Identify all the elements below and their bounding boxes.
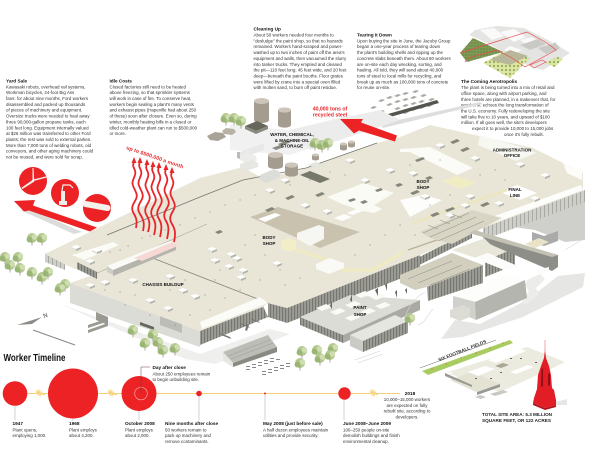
heading: Worker Timeline: Worker Timeline <box>4 352 66 364</box>
cylinders <box>254 98 355 177</box>
label: body shop east <box>416 179 430 190</box>
label: paint shop: PAINT <box>353 305 367 310</box>
label: paint shop: SHOP <box>354 312 366 317</box>
arrow: equipment leaving site <box>14 200 97 234</box>
text: Idle Costs: idled cold-weather plant can run to $500,000 <box>110 125 198 130</box>
text: Cleaning Up: with molten sand, to burn off paint residue. <box>254 85 337 90</box>
circles <box>3 381 27 406</box>
timeline label: Nine months after close: remove contaminants. <box>165 439 209 444</box>
text: Yard Sale: at $26 million was transferred to other Ford <box>6 131 91 136</box>
text: Cleaning Up: remained. Workers hand-scraped and power- <box>254 44 343 49</box>
text: Cleaning Up: About 50 workers needed four months to <box>254 32 334 38</box>
text: Idle Costs: will work in case of fire. To conserve heat, <box>110 96 191 101</box>
timeline label: May 2008: May 2008 (just before sale) <box>263 421 323 426</box>
text: Cleaning Up <box>254 27 347 90</box>
label: administration office: OFFICE <box>504 153 520 158</box>
leader lines <box>15 395 344 421</box>
text: Yard Sale: plants; the rest was sold to external parties. <box>6 137 91 142</box>
label: final line: LINE <box>510 193 520 198</box>
text: Idle Costs: or more. <box>110 131 126 136</box>
west block wall <box>45 253 65 270</box>
storage tanks and utility buildings <box>207 98 355 183</box>
paint shop <box>300 283 420 352</box>
central wall <box>400 230 472 275</box>
label: body shop west <box>262 235 276 246</box>
seam between chassis and body shop <box>93 224 207 275</box>
label: body shop east: SHOP <box>417 185 429 190</box>
yellow transfer tubes <box>284 243 403 270</box>
rooftop gear <box>215 139 490 234</box>
text: Tearing It Down: began a one-year process of tearing down <box>357 44 441 49</box>
text: Idle Costs: above freezing, so that sprinkler systems <box>110 90 191 95</box>
compass north arrow: N <box>43 313 49 320</box>
west-side loading docks <box>88 312 260 339</box>
parking lot: demolished rows <box>367 90 483 128</box>
timeline label: June 2008–June 2009: demolish buildings and finish <box>343 433 400 438</box>
text: Cleaning Up: "desludge" the paint shop, so that no hazards <box>254 38 344 43</box>
label: final line: FINAL <box>508 187 522 192</box>
text: Idle Costs <box>110 78 198 136</box>
open bay in final line <box>420 210 502 244</box>
timeline label: October 2008: about 2,000. <box>125 433 150 438</box>
text: Cleaning Up: the pit—110 feet long, 45 feet wide, and 20 feet <box>254 68 347 73</box>
icon: Empire State Building <box>533 340 567 410</box>
south-east block <box>400 230 585 325</box>
text: Cleaning Up: equipment and walls, then vacuumed the slurry <box>254 56 347 61</box>
ground shadows <box>60 110 585 364</box>
text: Yard Sale: three 90,000-gallon propane tanks, each <box>6 119 86 124</box>
text: Yard Sale: Workman bicycles, 24-foot Big Ass <box>6 90 75 95</box>
label: body shop west: BODY <box>262 235 276 240</box>
timeline label: Day after close: Day after close <box>152 365 186 370</box>
timeline label: Day after close <box>152 365 211 382</box>
timeline label: 1947: employing 1,000. <box>12 433 46 438</box>
icon: fan <box>19 167 47 195</box>
chassis south-west wall <box>70 283 200 347</box>
timeline label: 1947 <box>12 421 46 438</box>
timeline label: 1968 <box>69 421 98 438</box>
text: The Coming Aerotropolis: office space, along with airport parking, and <box>461 91 547 96</box>
text: Cleaning Up: were lifted by crane into a special oven filled <box>254 79 341 84</box>
label: administration office <box>493 148 531 158</box>
label: body shop west: SHOP <box>263 241 275 246</box>
text: The Coming Aerotropolis: once it's fully rebuilt. <box>504 132 544 137</box>
text: Yard Sale: More than 7,000 tons of welding robots, old <box>6 143 92 148</box>
compass north arrow <box>17 313 75 345</box>
timeline label: 2018 <box>384 391 431 419</box>
timeline label: Nine months after close: 50 workers remain to <box>165 427 207 432</box>
label: recycled steel: 40,000 tons of <box>313 106 348 112</box>
text: Tearing It Down: hauling. All told, they will send about 40,000 <box>357 68 444 73</box>
plant labels: STORAGE <box>281 144 303 149</box>
text: total site area: TOTAL SITE AREA: 5.3 MILLION <box>482 412 553 417</box>
label: chassis buildup: CHASSIS BUILDUP <box>142 282 184 287</box>
label: paint shop <box>353 305 367 317</box>
chassis details and roof units <box>71 245 81 251</box>
text: Tearing It Down: concrete slabs beneath them. About 60 workers <box>357 56 452 61</box>
text: Yard Sale <box>6 78 94 160</box>
timeline label: 1968: 1968 <box>69 421 80 426</box>
text: Tearing It Down: Tearing It Down <box>357 32 392 38</box>
text: Cleaning Up: Cleaning Up <box>254 27 281 32</box>
text: Idle Costs: Closed factories still need to be heated <box>110 84 187 89</box>
text: Yard Sale: Oversize trucks were needed to haul away <box>6 114 90 119</box>
timeline label: June 2008–June 2009: environmental cleanup. <box>343 439 389 444</box>
white strip along final line <box>481 185 583 227</box>
text: Tearing It Down: tons of steel to local mills for recycling, and <box>357 74 442 78</box>
plant labels: WATER, CHEMICAL, <box>270 132 314 137</box>
label: up to $500,000 a month: up to $500,000 a month <box>125 145 184 170</box>
six football fields strip: SIX FOOTBALL FIELDS <box>438 339 487 362</box>
label: recycled steel <box>313 106 348 118</box>
text: The Coming Aerotropolis: expect it to provide 10,000 to 15,000 jobs <box>472 126 554 131</box>
label: recycled steel: recycled steel <box>313 112 348 118</box>
timeline label: October 2008: October 2008 <box>125 421 155 426</box>
text: Yard Sale: conveyors, and other aging machinery could <box>6 149 94 154</box>
timeline label: June 2008–June 2009: 100–250 people on-site <box>343 427 390 432</box>
timeline label: 2018: developers. <box>396 414 418 419</box>
warehouse and parking <box>223 335 383 375</box>
text: Yard Sale: disassembled and packed up thousands <box>6 102 86 107</box>
heat arrows <box>132 157 175 242</box>
text: Idle Costs: of these) soon after closure. Even so, during <box>110 114 197 119</box>
dark roof section <box>250 207 360 248</box>
text: Yard Sale: fans: for about nine months, Ford workers <box>6 96 89 101</box>
text: Tearing It Down: Upon buying the site in June, the Jacoby Group <box>357 38 451 43</box>
text: Yard Sale: Yard Sale <box>6 78 28 84</box>
icon: robot <box>51 179 79 207</box>
timeline label: May 2008: A half dozen employees maintain <box>263 427 329 432</box>
timeline label: 1947: 1947 <box>12 421 23 426</box>
timeline label: 2018: are expected on fully <box>387 403 428 408</box>
text: Cleaning Up: deep—beneath the paint booths. Floor grates <box>254 74 344 78</box>
text: The Coming Aerotropolis: three hotels are planned, in a makeover that, for <box>461 97 556 102</box>
text: The Coming Aerotropolis: will take five to 10 years, and upward of $100 <box>461 114 550 119</box>
timeline <box>3 367 400 421</box>
text: Idle Costs: winter, monthly heating bills in a closed or <box>110 119 192 124</box>
icon: propane tank <box>82 194 111 222</box>
timeline label: May 2008: utilities and provide security. <box>263 433 318 438</box>
label: final line <box>508 187 522 198</box>
text: The Coming Aerotropolis: the U.S. economy. Fully redeveloping the site <box>461 108 550 114</box>
text: total site area: SQUARE FEET, OR 122 ACRES <box>482 418 551 423</box>
text: Idle Costs: workers begin sealing a plant's many vents <box>110 102 195 107</box>
plant labels: & MACHINE-OIL <box>275 138 309 143</box>
chassis/body white band <box>200 297 268 329</box>
text: Tearing It Down: for reuse on-site. <box>357 85 390 90</box>
timeline label: 2018: 10,000–15,000 workers <box>384 397 431 402</box>
text: The Coming Aerotropolis: good or ill, echoes the long transformation of <box>461 103 549 108</box>
text: The Coming Aerotropolis: million. If all goes well, the site's developers <box>461 120 547 125</box>
six football fields strip <box>420 339 513 375</box>
trees <box>0 113 415 370</box>
timeline label: Nine months after close: Nine months after close <box>165 421 219 426</box>
timeline label: October 2008 <box>125 421 155 438</box>
pink thermal band <box>134 242 180 261</box>
timeline label: 1968: about 4,200. <box>69 433 94 438</box>
text: total site area <box>482 412 553 423</box>
pump house <box>245 121 268 131</box>
text: Idle Costs: Idle Costs <box>110 78 132 84</box>
plant labels <box>270 132 314 149</box>
timeline label: 1947: Plant opens, <box>12 427 37 432</box>
north ledge line <box>107 143 377 235</box>
text: Tearing It Down <box>357 32 452 90</box>
aerotropolis map <box>460 26 570 78</box>
timeline label: 2018: 2018 <box>405 391 416 396</box>
right-hand walls <box>480 190 585 242</box>
timeline label: Nine months after close: pack up machinery and <box>165 433 211 438</box>
central white roofs <box>327 183 394 213</box>
label: body shop east: BODY <box>416 179 430 184</box>
main south-east wall <box>268 303 287 323</box>
timeline label: June 2008–June 2009: June 2008–June 2009 <box>343 421 391 426</box>
text: Tearing It Down: the plant's building shells and ripping up the <box>357 50 443 55</box>
timeline label: Day after close: About 250 employees remain <box>152 371 211 376</box>
chassis south-east wall <box>200 306 268 345</box>
text: Yard Sale: not be reused, and were sold for scrap. <box>6 154 83 160</box>
label: administration office: ADMINISTRATION <box>493 148 531 152</box>
timeline label: May 2008 <box>263 421 329 438</box>
text: Tearing It Down: break up as much as 100,000 tons of concrete <box>357 79 449 84</box>
text: The Coming Aerotropolis <box>461 79 556 137</box>
timeline label: 1968: Plant employs <box>69 427 98 432</box>
roof dots <box>105 160 505 325</box>
text: Cleaning Up: washed up to two inches of paint off the area's <box>254 50 345 55</box>
text: Tearing It Down: are on-site each day wrecking, sorting, and <box>357 62 442 67</box>
site footprint <box>445 347 565 399</box>
plant: main roof <box>45 125 583 331</box>
text: Cleaning Up: into tanker trucks. They emptied and cleaned <box>254 62 343 67</box>
text: Yard Sale: Kawasaki robots, overhead rail systems, <box>6 84 85 89</box>
text: Yard Sale: of pieces of machinery and equipment. <box>6 108 82 113</box>
text: Yard Sale: 100 feet long. Equipment internally valued <box>6 125 89 130</box>
timeline label: June 2008–June 2009 <box>343 421 400 444</box>
timeline label: Nine months after close <box>165 421 219 444</box>
text: The Coming Aerotropolis: The plant is being turned into a mix of retail and <box>461 85 555 90</box>
white ridge <box>72 242 119 260</box>
timeline label: 2018: rebuilt site, according to <box>384 409 431 414</box>
text: Idle Costs: and exhaust pipes (Hapeville had about 250 <box>110 108 197 113</box>
arrow: recycled steel <box>340 119 397 142</box>
timeline label: Day after close: to begin unbuilding site. <box>152 377 199 382</box>
plant: walls <box>45 190 585 347</box>
timeline label: October 2008: Plant employs <box>125 427 154 432</box>
text: The Coming Aerotropolis: The Coming Aerotropolis <box>461 79 517 84</box>
